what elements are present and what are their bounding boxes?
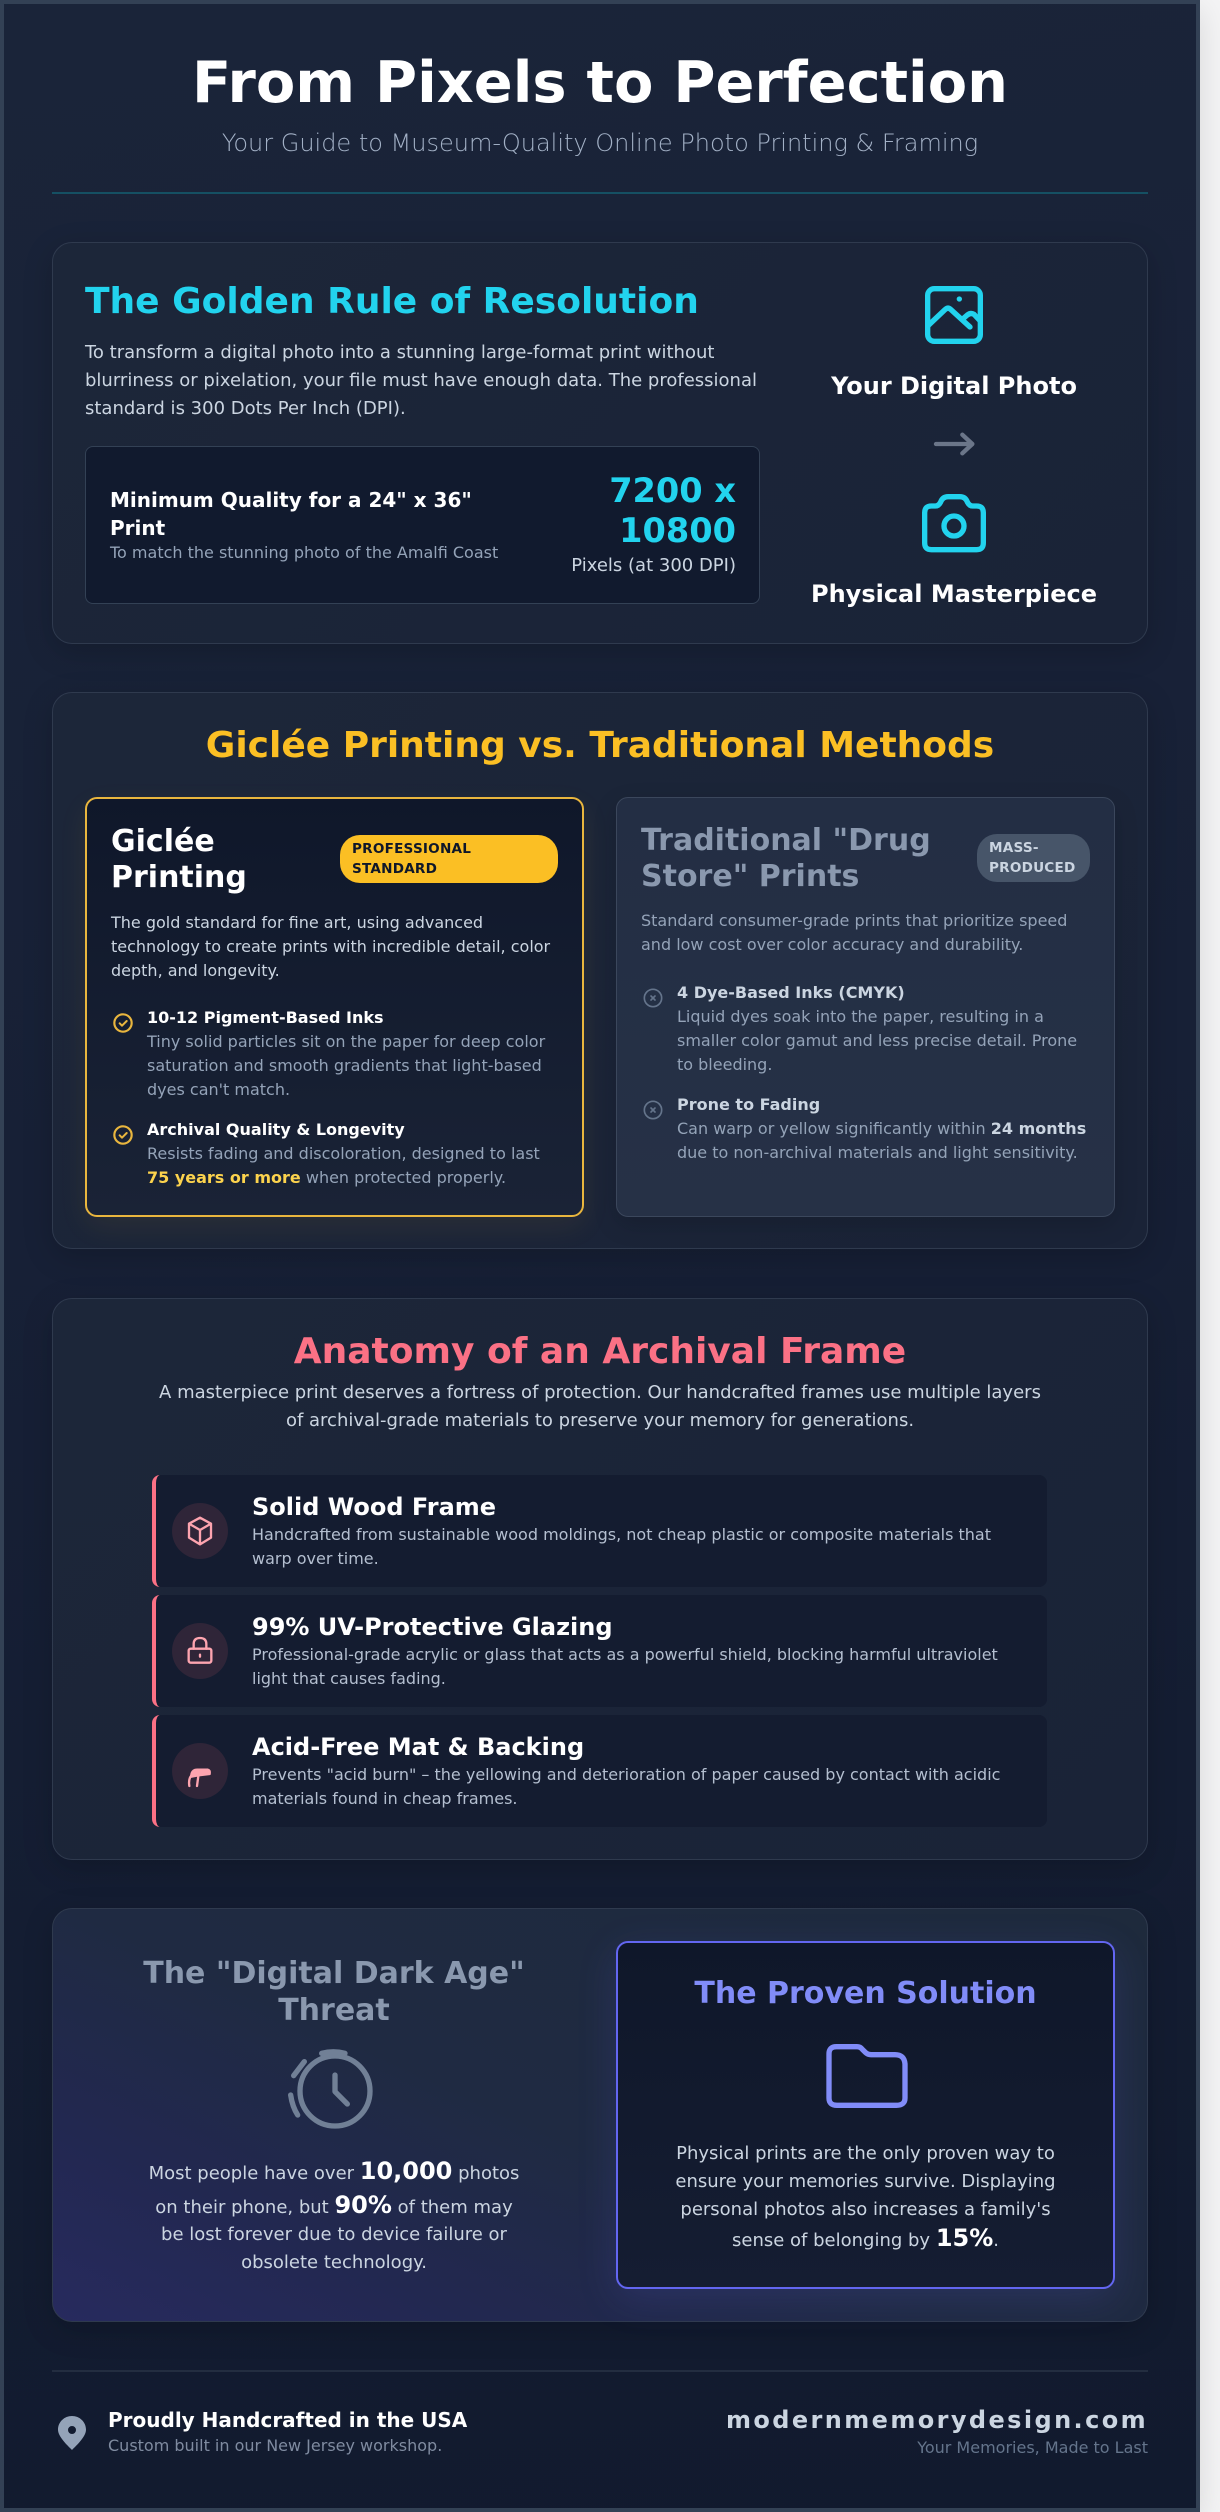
footer: craftsmanship: Proudly Handcrafted in the USA [108,2408,467,2432]
text block: digital dark age stat [149,2157,519,2273]
card title: Store" Prints [641,859,859,894]
text block: resolution explanation: To transform a digital photo into a stunning large-format print without [85,342,714,363]
layer: uv glazing [152,1595,1047,1707]
callout note: To match the stunning photo of the Amalfi Coast [110,543,498,562]
layer description: light that causes fading. [252,1669,446,1688]
feature: fading: Can warp or yellow significantly within 24 months [677,1119,1086,1138]
text block: digital dark age stat: be lost forever due to device failure or [161,2224,507,2245]
text block: resolution explanation: blurriness or pixelation, your file must have enough data. The professional [85,370,757,391]
icon: cube [172,1503,228,1559]
icon: folder [826,2044,908,2108]
icon: clock [288,2049,373,2129]
feature: dye inks: 4 Dye-Based Inks (CMYK) [677,983,905,1002]
badge: professional standard [340,835,558,883]
icon: check 1 [113,1013,133,1033]
text block: digital dark age stat: on their phone, but 90% of them may [155,2191,513,2219]
badge: professional standard: STANDARD [352,861,437,877]
text block: resolution explanation: standard is 300 Dots Per Inch (DPI). [85,398,406,419]
icon: lock [172,1623,228,1679]
feature: archival quality: Archival Quality & Longevity [147,1120,405,1139]
callout: minimum quality [85,446,760,604]
heading: digital dark age [143,1956,525,2028]
text block: solution: sense of belonging by 15%. [732,2224,999,2252]
text block: anatomy intro: of archival-grade materials to preserve your memory for generations. [286,1410,914,1431]
callout number: 10800 [619,511,736,550]
card title: Printing [111,860,247,895]
layer description: warp over time. [252,1549,379,1568]
text block: solution: ensure your memories survive. Displaying [675,2171,1056,2192]
arrow: photo to print [934,432,974,456]
icon: location pin [58,2416,86,2450]
card title: Traditional "Drug [641,823,931,858]
text block: anatomy intro: A masterpiece print deserves a fortress of protection. Our handcrafted frames use multiple layers [159,1382,1041,1403]
text block: digital dark age stat: Most people have over 10,000 photos [149,2157,519,2185]
icon: paint roller [172,1743,228,1799]
card: traditional prints [616,797,1115,1217]
icon: cross 2 [644,1100,662,1120]
feature: pigment inks: saturation and smooth gradients that light-based [147,1056,542,1075]
text block: digital dark age stat: obsolete technology. [241,2252,427,2273]
title: From Pixels to Perfection [192,49,1008,116]
layer description: Prevents "acid burn" – the yellowing and deterioration of paper caused by contact with acidic [252,1765,1000,1784]
feature: fading: Prone to Fading [677,1095,820,1114]
card: proven solution [616,1941,1115,2289]
card heading: The Proven Solution [694,1976,1037,2011]
layer title: 99% UV-Protective Glazing [252,1613,613,1641]
card description: depth, and longevity. [111,961,280,980]
feature: dye inks: smaller color gamut and less precise detail. Prone [677,1031,1077,1050]
icon: digital photo [925,286,983,344]
layer title: Solid Wood Frame [252,1493,496,1521]
callout number [609,471,736,550]
text block: solution [675,2143,1056,2252]
text block: solution: Physical prints are the only proven way to [676,2143,1055,2164]
card description: Standard consumer-grade prints that prioritize speed [641,911,1067,930]
callout label: Minimum Quality for a 24" x 36" [110,488,472,512]
callout label [110,488,472,540]
subtitle: Your Guide to Museum-Quality Online Photo Printing & Framing [222,129,978,157]
label: your digital photo: Your Digital Photo [831,372,1077,400]
feature: dye inks: to bleeding. [677,1055,772,1074]
footer: tagline: Your Memories, Made to Last [917,2438,1148,2457]
feature: pigment inks: 10-12 Pigment-Based Inks [147,1008,384,1027]
feature: fading [677,1095,1086,1162]
icon: cross 1 [644,988,662,1008]
feature: fading: due to non-archival materials and light sensitivity. [677,1143,1078,1162]
card description: The gold standard for fine art, using advanced [111,913,483,932]
card description: technology to create prints with incredible detail, color [111,937,550,956]
layer description: Handcrafted from sustainable wood moldings, not cheap plastic or composite materials that [252,1525,991,1544]
icon: camera [922,494,986,552]
panel: golden rule of resolution [52,242,1148,644]
feature: dye inks: Liquid dyes soak into the paper, resulting in a [677,1007,1044,1026]
card title [111,824,247,895]
footer: website: modernmemorydesign.com [726,2406,1148,2434]
text block: resolution explanation [84,342,757,419]
feature: dye inks [677,983,1077,1074]
label: physical masterpiece: Physical Masterpiece [811,580,1097,608]
layer: solid wood frame [152,1475,1047,1587]
layer description [252,1645,998,1688]
layer description: materials found in cheap frames. [252,1789,518,1808]
panel: giclee vs traditional [52,692,1148,1249]
badge: mass-produced [977,834,1090,882]
badge: mass-produced: MASS- [989,840,1039,856]
heading: giclee vs traditional: Giclée Printing vs. Traditional Methods [206,725,994,766]
card title: Giclée [111,824,215,859]
badge: mass-produced: PRODUCED [989,860,1075,876]
panel: anatomy of an archival frame [52,1298,1148,1860]
layer description [252,1525,991,1568]
panel: digital dark age and solution [52,1908,1148,2322]
callout unit: Pixels (at 300 DPI) [571,555,736,576]
card description: and low cost over color accuracy and durability. [641,935,1023,954]
feature: pigment inks [146,1008,546,1099]
heading: anatomy: Anatomy of an Archival Frame [294,1331,906,1372]
callout label: Print [110,516,165,540]
callout number: 7200 x [609,471,736,510]
heading: digital dark age: The "Digital Dark Age" [143,1956,525,1991]
feature: pigment inks: Tiny solid particles sit on the paper for deep color [147,1032,545,1051]
card title [641,823,931,894]
card description [641,911,1067,954]
text block: anatomy intro [159,1382,1041,1431]
heading: digital dark age: Threat [278,1993,390,2028]
feature: pigment inks: dyes can't match. [147,1080,290,1099]
layer title: Acid-Free Mat & Backing [252,1733,584,1761]
icon: check 2 [113,1125,133,1145]
badge: professional standard: PROFESSIONAL [352,841,471,857]
card: giclee printing [85,797,584,1217]
text block: solution: personal photos also increases a family's [680,2199,1051,2220]
heading: golden rule: The Golden Rule of Resolution [85,281,699,322]
layer description: Professional-grade acrylic or glass that acts as a powerful shield, blocking harmful ultraviolet [252,1645,998,1664]
layer: acid-free mat [152,1715,1047,1827]
feature: archival quality: Resists fading and discoloration, designed to last [147,1144,540,1163]
card description [110,913,550,980]
footer: workshop note: Custom built in our New Jersey workshop. [108,2436,442,2455]
layer description [252,1765,1000,1808]
feature: archival quality: 75 years or more when protected properly. [147,1168,506,1187]
feature: archival quality [147,1120,540,1187]
